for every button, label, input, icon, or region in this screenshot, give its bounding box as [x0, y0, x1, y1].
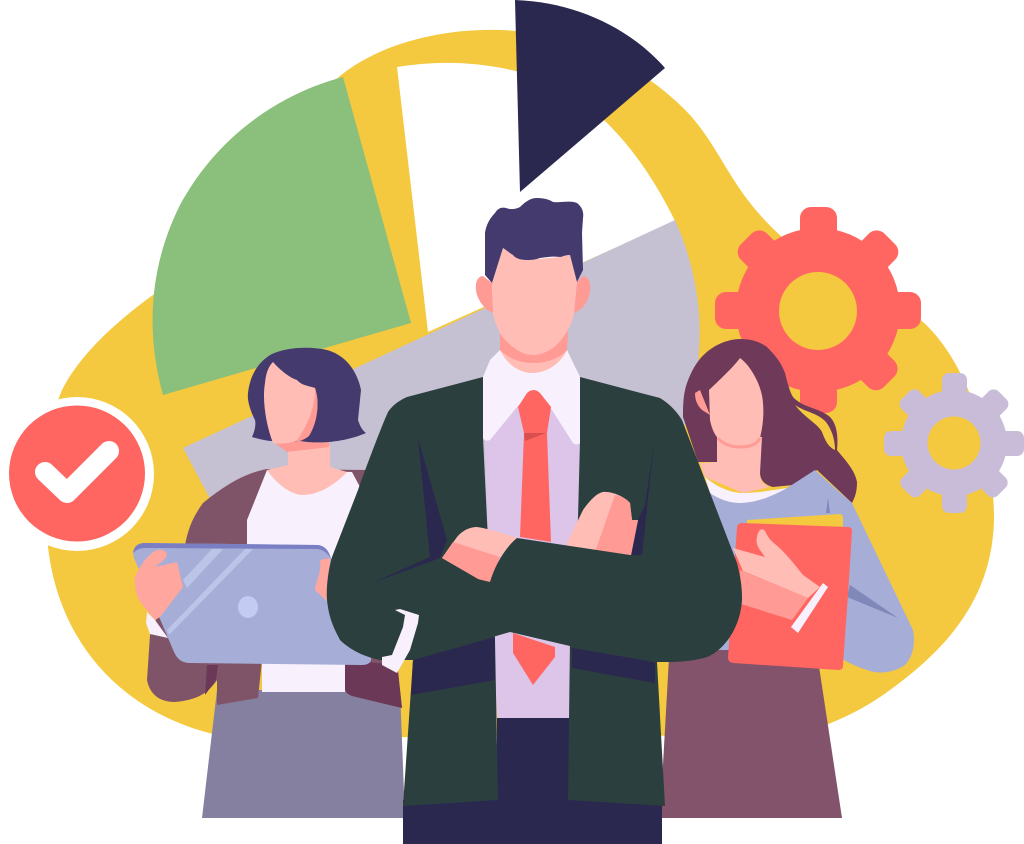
person: right woman	[660, 339, 914, 818]
folder back	[747, 514, 843, 530]
neck shadow	[500, 330, 568, 363]
face	[709, 358, 763, 449]
skirt	[660, 640, 842, 818]
folder	[728, 523, 852, 670]
collar	[483, 350, 580, 444]
left hand	[442, 527, 517, 582]
jacket flap shadow	[345, 660, 402, 708]
hair	[485, 198, 583, 283]
cuff	[146, 612, 168, 638]
check badge	[0, 397, 154, 551]
sweater	[690, 470, 914, 672]
trousers	[403, 800, 662, 844]
person: central man	[327, 198, 742, 844]
left hand	[135, 550, 183, 620]
sleeve shadow	[847, 585, 898, 618]
cuff	[382, 609, 419, 673]
pie sector: green	[153, 77, 411, 395]
gear: lavender	[884, 373, 1024, 513]
face	[492, 248, 577, 355]
tie	[513, 390, 555, 685]
forearm	[740, 570, 808, 620]
shirt	[247, 470, 360, 692]
right hand	[567, 492, 638, 560]
person: left woman	[133, 348, 405, 818]
shirt	[483, 395, 580, 718]
cuff	[791, 583, 828, 633]
neck	[700, 437, 770, 493]
jacket	[327, 377, 742, 806]
ear	[695, 390, 710, 415]
hair	[683, 339, 857, 503]
pie sector: white	[397, 63, 675, 332]
tablet highlights	[167, 549, 253, 635]
waist shadow	[411, 637, 655, 695]
hair	[248, 348, 366, 442]
tablet	[133, 543, 371, 665]
hand	[733, 529, 820, 598]
tablet dot	[238, 596, 258, 618]
right hand	[315, 558, 331, 605]
face	[264, 362, 318, 444]
ear right	[574, 276, 590, 313]
hair gap	[795, 405, 835, 450]
neck	[267, 445, 347, 495]
gear: red	[715, 207, 921, 413]
jacket	[147, 469, 402, 708]
pie sector: navy	[515, 0, 665, 192]
lapel shadows	[372, 438, 654, 583]
pie chart	[153, 0, 700, 560]
ear left	[476, 276, 493, 313]
collar	[705, 477, 787, 503]
face shadow	[296, 388, 317, 442]
neck	[500, 330, 567, 378]
tablet top edge	[133, 543, 331, 558]
skirt	[202, 690, 405, 818]
crossed arm	[370, 538, 742, 662]
pie sector: gray	[183, 220, 700, 560]
yellow background blob	[44, 30, 994, 738]
neck line	[718, 438, 760, 447]
